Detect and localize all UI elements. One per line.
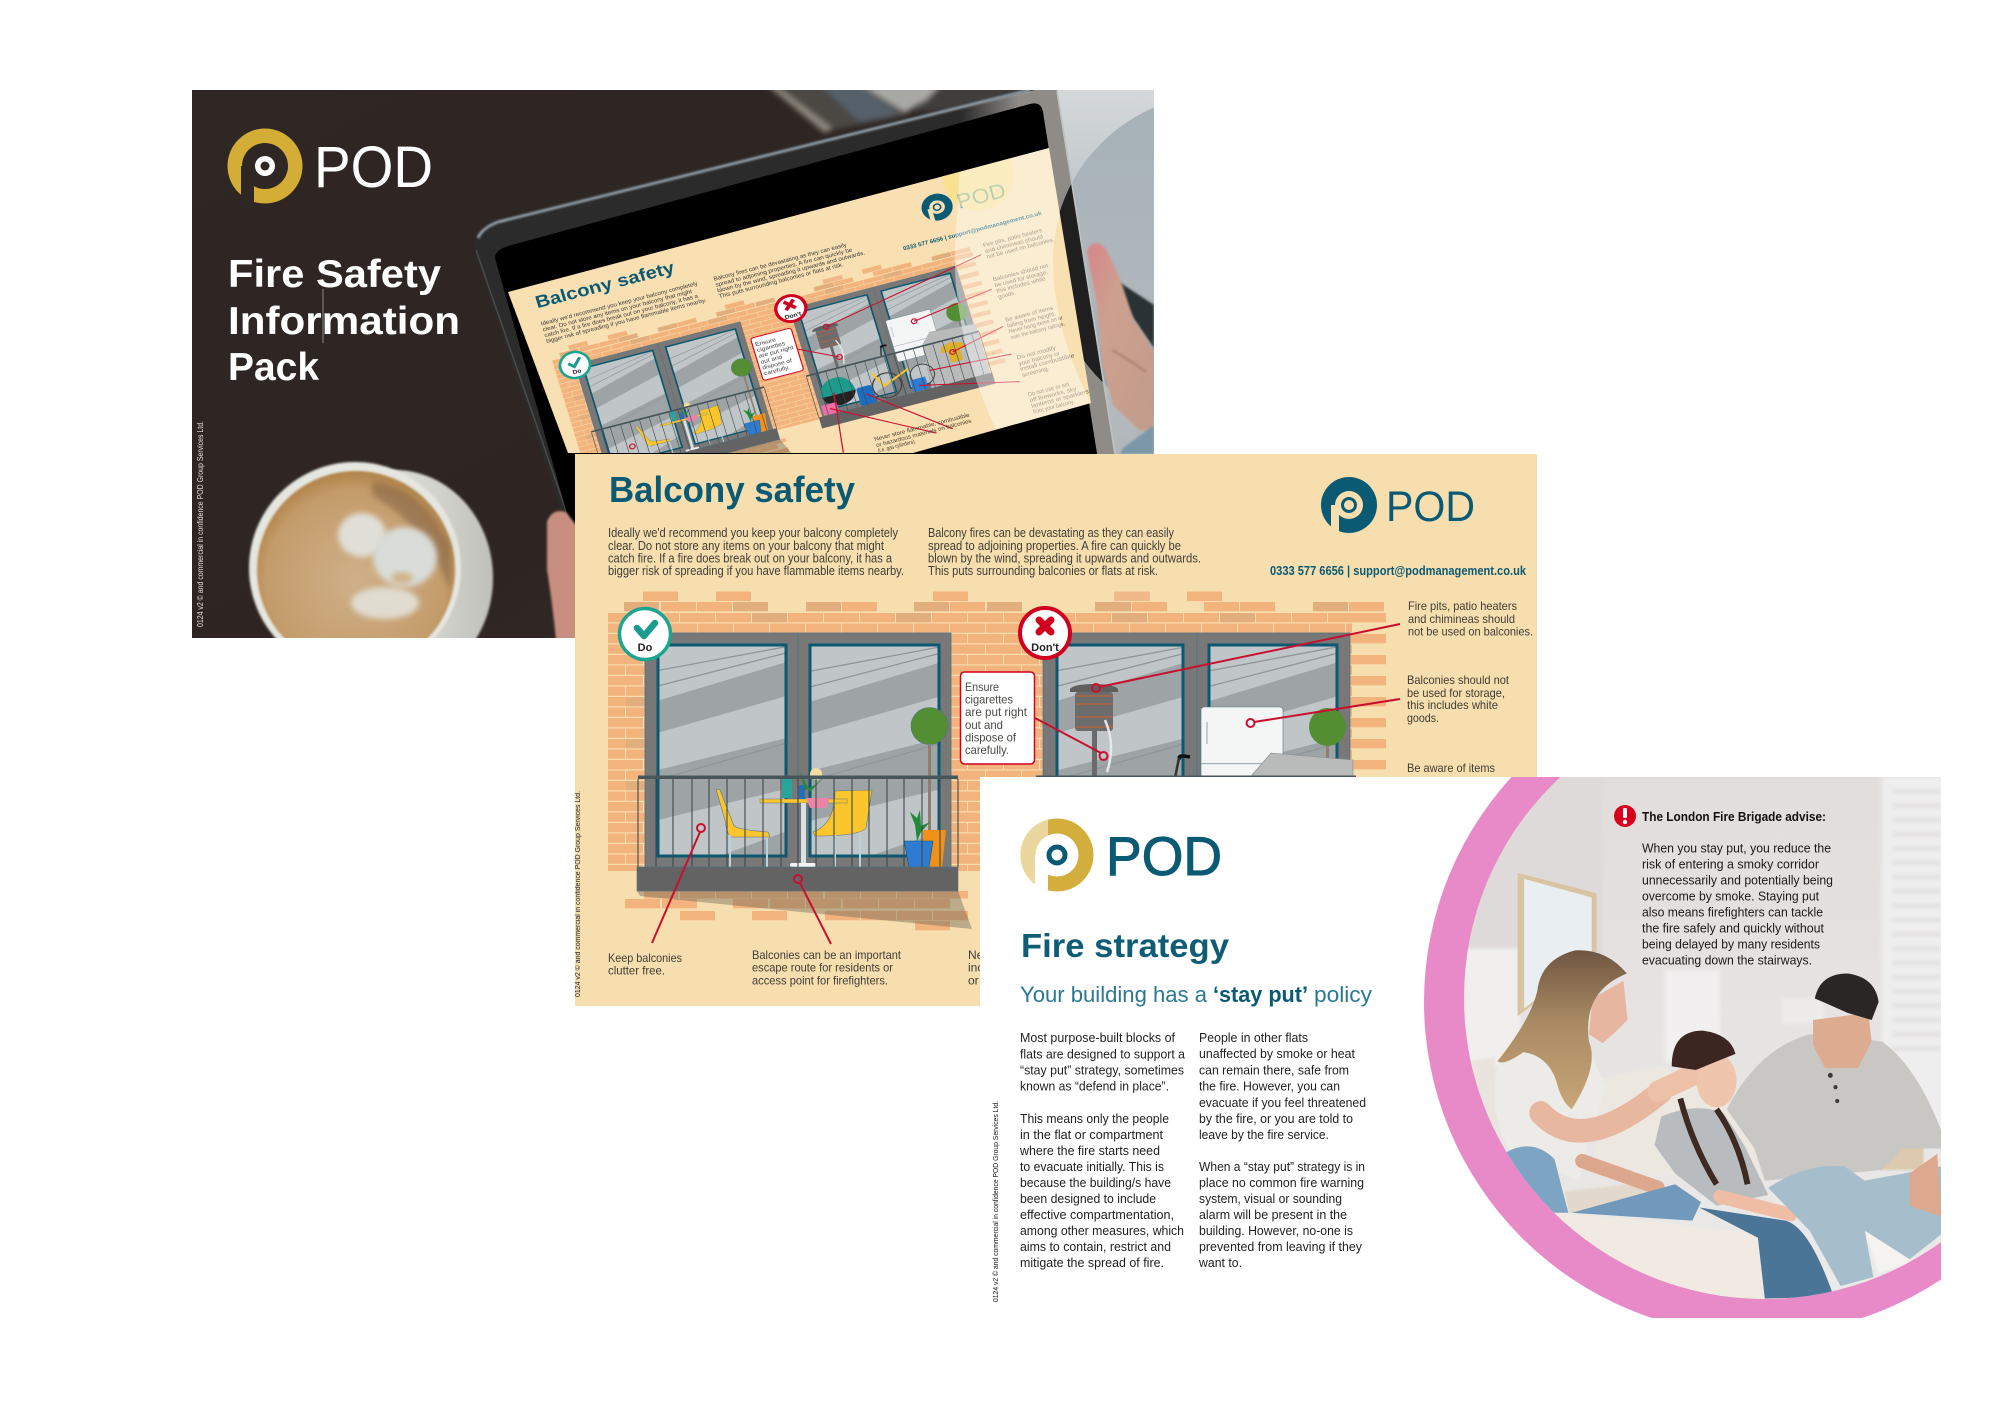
tablet screen document: (i.e. gas cylinders). [877, 438, 917, 454]
tablet note box: dispose of [762, 358, 793, 371]
badge: do: Do [638, 642, 653, 654]
tablet badge dont: Don't [784, 311, 802, 321]
logo: POD teal: POD [1386, 483, 1475, 531]
tablet annotations: Do not use or set [1027, 381, 1070, 398]
text block: London Fire Brigade advice: overcome by smoke. Staying put [1642, 888, 1819, 904]
text block: column 2: the fire. However, you can [1199, 1078, 1340, 1094]
photo: left finger [546, 510, 575, 638]
tablet annotations: install combustible [1019, 352, 1076, 373]
title: Fire Safety Information Pack: Pack [228, 346, 319, 389]
text block: column 1: been designed to include [1020, 1191, 1156, 1206]
annotation: escape route: Balconies can be an important [752, 948, 902, 962]
tablet intro copy: This puts surrounding balconies or flats at risk. [718, 262, 845, 300]
tablet black screen [495, 103, 1098, 560]
text block: column 2: place no common fire warning [1199, 1175, 1364, 1190]
text block: column 1: because the building/s have [1020, 1175, 1171, 1190]
annotation: never store: Never store [968, 948, 1030, 962]
tablet annotations: and chimineas should [984, 234, 1044, 255]
text block: column 2: People in other flats [1199, 1030, 1308, 1045]
subheading: stay put policy [1020, 982, 1372, 1007]
tablet intro copy: blown by the wind, spreading it upwards and outwards. [716, 250, 866, 294]
tablet annotations: goods. [997, 290, 1017, 301]
text block: column 2: can remain there, safe from [1199, 1062, 1349, 1078]
text block: London Fire Brigade advice: the fire safely and quickly without [1642, 920, 1824, 936]
tablet annotations: falling from height. [1006, 311, 1057, 330]
logo: POD gold and teal [1020, 818, 1222, 893]
leader lines [652, 624, 1400, 944]
photo background: light window area [1057, 90, 1154, 454]
annotation: fire pits [1408, 599, 1533, 638]
text block: intro column 2 [928, 526, 1201, 578]
annotation: never store: or hazardous [968, 974, 1038, 988]
text block: intro column 1: clear. Do not store any items on your balcony that might [608, 539, 884, 553]
annotation: fire pits: not be used on balconies. [1408, 624, 1533, 638]
text block: intro column 1 [608, 526, 904, 578]
tablet body [479, 90, 1114, 510]
father [1727, 974, 1941, 1286]
girl [1654, 1031, 1834, 1299]
annotation: never store [968, 948, 1038, 988]
text block: column 2 [1198, 1030, 1366, 1270]
tablet annotations: off fireworks, sky [1029, 386, 1078, 404]
text block: column 1: Most purpose-built blocks of [1020, 1030, 1175, 1045]
tablet note box: out and [760, 354, 784, 366]
text block: London Fire Brigade advice: risk of entering a smoky corridor [1642, 856, 1820, 872]
tablet annotations: be used for storage, [994, 269, 1049, 289]
annotation: fire pits: Fire pits, patio heaters [1408, 599, 1517, 613]
tablet annotations: Fire pits, patio heaters [982, 227, 1043, 249]
badge: do [620, 608, 670, 660]
callout: cigarettes: are put right [965, 705, 1028, 719]
panel: fire strategy [980, 669, 2000, 1341]
title: Fire Safety Information Pack [230, 258, 458, 380]
tablet intro copy: spread to adjoining properties. A fire can quickly be [715, 247, 854, 289]
text block: column 1: where the fire starts need [1019, 1143, 1160, 1158]
annotation: falling items: Be aware of items [1407, 761, 1495, 775]
tablet intro copy: catch fire. If a fire does break out on your balcony, it has a [544, 293, 699, 339]
tablet annotations: this includes white [996, 276, 1047, 295]
contact details: 0333 577 6656 | support@podmanagement.co.uk [1270, 564, 1526, 578]
heading: Balcony safety: Balcony safety [609, 469, 855, 510]
callout: cigarettes: Ensure [965, 680, 999, 694]
text block: London Fire Brigade heading: The London Fire Brigade advise: [1642, 810, 1826, 824]
text block: column 1: mitigate the spread of fire. [1020, 1255, 1164, 1270]
panel: balcony safety [574, 454, 1537, 1006]
tablet leader lines [629, 254, 1020, 453]
photo background: dark table [192, 90, 1035, 638]
tablet annotations: Do not modify [1016, 345, 1058, 361]
tablet screen glare: pale lens [955, 140, 1092, 432]
text block: column 2: evacuate if you feel threatened [1199, 1095, 1366, 1110]
text block: intro column 2: blown by the wind, spreading it upwards and outwards. [928, 552, 1201, 566]
text block: intro column 1: Ideally we'd recommend you keep your balcony completely [608, 526, 899, 540]
tablet screen glare: yellow circle [942, 158, 1014, 211]
annotation: fire pits: and chimineas should [1408, 612, 1515, 626]
text block: column 2: alarm will be present in the [1199, 1207, 1347, 1222]
callout: cigarettes: dispose of [965, 730, 1017, 744]
text block: intro column 2: This puts surrounding balconies or flats at risk. [928, 564, 1158, 578]
tablet annotations: Never hang items on or [1008, 315, 1064, 335]
text block: column 2: prevented from leaving if they [1199, 1239, 1362, 1254]
tablet note box: carefully. [763, 364, 791, 377]
logo: POD gold on dark [228, 128, 433, 208]
mother [1494, 950, 1701, 1221]
text block: London Fire Brigade advice: also means firefighters can tackle [1642, 904, 1823, 920]
pink ring [1424, 669, 2000, 1335]
text block: column 1: effective compartmentation, [1020, 1207, 1174, 1222]
text block: column 1: “stay put” strategy, sometimes [1020, 1062, 1184, 1078]
tablet title: Balcony safety [533, 257, 677, 312]
logo: POD teal [1321, 477, 1475, 535]
text block: column 2: leave by the fire service. [1199, 1127, 1329, 1142]
text block: London Fire Brigade advice: being delayed by many residents [1642, 936, 1820, 952]
tablet intro copy: bigger risk of spreading if you have flammable items nearby. [545, 297, 707, 345]
tablet intro copy [540, 238, 868, 345]
photo background: blurred objects behind tablet [767, 85, 1045, 133]
tablet annotations: over the balcony railings. [1010, 321, 1066, 341]
heading: Fire strategy: Fire strategy [1021, 927, 1230, 964]
text block: column 2: unaffected by smoke or heat [1199, 1046, 1355, 1061]
text block: column 2: by the fire, or you are told to [1199, 1111, 1353, 1126]
text block: column 2: system, visual or sounding [1199, 1191, 1342, 1206]
text block: intro column 1: catch fire. If a fire does break out on your balcony, it has a [608, 552, 892, 566]
text block: column 1: This means only the people [1020, 1111, 1169, 1126]
tablet badge do: Do [572, 368, 583, 376]
icon: exclamation warning [1614, 805, 1636, 827]
text block: London Fire Brigade advice: unnecessarily and potentially being [1642, 872, 1833, 888]
tablet annotations [983, 229, 1089, 414]
tablet POD logo: POD [954, 179, 1009, 213]
text block: London Fire Brigade advice: When you stay put, you reduce the [1642, 840, 1831, 856]
copyright line: 0124 v2 © and commercial in confidence POD Group Services Ltd. [195, 421, 205, 627]
tablet screen document: Never store flammable, combustible [874, 412, 971, 443]
text block: column 1: flats are designed to support a [1020, 1046, 1186, 1062]
annotation: escape route [752, 948, 902, 988]
title: Fire Safety Information Pack: Fire Safety [228, 253, 441, 296]
text block: intro column 2: spread to adjoining properties. A fire can quickly be [928, 539, 1181, 553]
text block: column 1 [1019, 1030, 1186, 1270]
annotation: clutter free [608, 951, 682, 978]
callout: cigarettes: out and [965, 718, 1003, 732]
text block: column 1: to evacuate initially. This is [1020, 1159, 1164, 1174]
annotation: clutter free: Keep balconies [608, 951, 682, 965]
family photo [1420, 770, 1948, 1341]
text block: intro column 2: Balcony fires can be devastating as they can easily [928, 526, 1175, 540]
copyright line: 0124 v2 © and commercial in confidence POD Group Services Ltd. [574, 791, 582, 997]
annotation: storage: this includes white [1407, 698, 1498, 712]
logo: POD gold on dark: POD [314, 135, 433, 200]
tablet annotations: your balcony or [1018, 350, 1061, 367]
tablet annotations: from your balcony. [1032, 399, 1076, 416]
tablet screen document: or hazardous materials on balconies [875, 418, 972, 449]
annotation: escape route: access point for firefighters. [752, 974, 888, 988]
text block: column 1: among other measures, which [1020, 1223, 1184, 1238]
photo: coffee cup [247, 460, 494, 638]
subheading: stay put policy: policy [1314, 982, 1372, 1007]
tablet rim highlight [478, 90, 1030, 238]
copyright line: 0124 v2 © and commercial in confidence POD Group Services Ltd. [991, 1101, 1000, 1302]
subheading: stay put policy: Your building has a [1020, 982, 1208, 1007]
darker photo seen through the arc [1060, 108, 1154, 416]
annotation: storage: Balconies should not [1407, 673, 1510, 687]
illustration: do balcony [637, 633, 972, 929]
annotation: storage: be used for storage, [1407, 686, 1505, 700]
badge: don't [1020, 608, 1070, 658]
tablet intro copy: clear. Do not store any items on your balcony that might [542, 288, 693, 333]
text block: column 2: When a “stay put” strategy is in [1199, 1159, 1365, 1174]
tablet note box: are put right [758, 344, 795, 360]
tablet annotations: screening. [1021, 366, 1050, 379]
text block: intro column 1: bigger risk of spreading if you have flammable items nearby. [608, 564, 904, 578]
tablet annotations: lanterns or sparklers [1031, 389, 1090, 410]
tablet screen document [508, 148, 1091, 453]
tablet annotations: Be aware of items [1004, 305, 1054, 324]
panel: cover with tablet photo [192, 90, 1154, 638]
sofa [1468, 1057, 1923, 1306]
annotation: clutter free: clutter free. [608, 964, 665, 978]
text block: column 1: aims to contain, restrict and [1020, 1239, 1171, 1254]
picture frame [1518, 873, 1597, 1016]
tablet contact line: 0333 577 6656 | support@podmanagement.co.uk [902, 210, 1043, 252]
illustration: brick wall [608, 592, 1386, 930]
tablet badge dont [774, 294, 808, 323]
annotation: escape route: escape route for residents or [752, 960, 893, 974]
subheading: stay put policy: ‘stay put’ [1213, 982, 1308, 1007]
photo: hand holding tablet [1087, 243, 1154, 454]
logo: POD gold and teal: POD [1106, 825, 1222, 887]
text block: London Fire Brigade advice: evacuating down the stairways. [1642, 952, 1812, 968]
title: Fire Safety Information Pack: Information [228, 300, 460, 343]
tablet annotations: Balconies should not [992, 263, 1049, 283]
callout: cigarettes: cigarettes [965, 692, 1013, 706]
text block: column 2: building. However, no-one is [1199, 1223, 1353, 1238]
text block: column 1: in the flat or compartment [1020, 1127, 1163, 1142]
text block: column 2: want to. [1198, 1255, 1242, 1270]
tablet note box: Ensure [754, 337, 777, 348]
tablet intro copy: Ideally we'd recommend you keep your balcony completely [540, 280, 699, 327]
text block: column 1: known as “defend in place”. [1020, 1078, 1169, 1094]
tablet POD logo [922, 184, 1004, 221]
annotation: storage [1407, 673, 1510, 725]
tablet badge do [558, 350, 592, 380]
badge: don't: Don't [1031, 642, 1059, 654]
tablet intro copy: Balcony fires can be devastating as they can easily [713, 242, 848, 283]
text block: London Fire Brigade advice [1642, 840, 1833, 968]
callout: cigarettes [960, 672, 1034, 764]
tablet annotations: not be used on balconies. [986, 237, 1055, 260]
annotation: storage: goods. [1407, 711, 1439, 725]
tablet note box: cigarettes [756, 340, 786, 354]
tablet note box [750, 328, 804, 381]
room background [1465, 770, 1944, 1134]
illustration: don't balcony [1036, 633, 1357, 891]
annotation: never store: including [968, 960, 1015, 974]
callout: cigarettes: carefully. [965, 743, 1009, 757]
